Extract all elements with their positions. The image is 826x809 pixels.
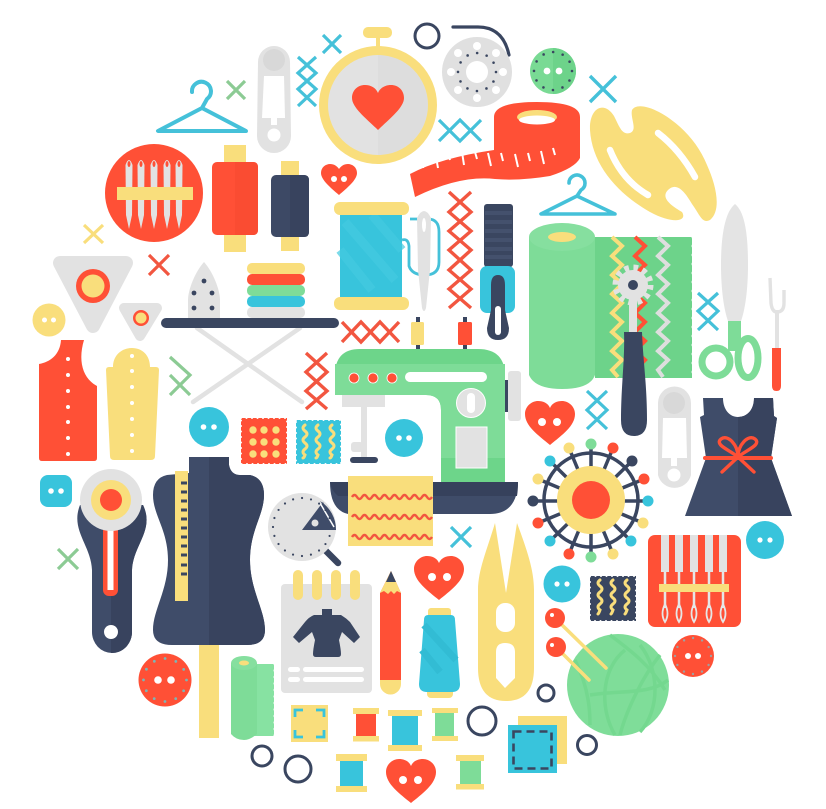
icon: scissors bbox=[702, 204, 758, 378]
icon: cyan stitch horizontal bbox=[439, 120, 481, 141]
icon: cross marks left bbox=[84, 225, 169, 275]
icon: yellow button bbox=[32, 304, 66, 336]
icon: cyan cross center bbox=[451, 527, 471, 547]
icon: bottom green spool bbox=[456, 755, 484, 790]
icon: needles on red circle bbox=[105, 144, 203, 242]
icon: yellow sleeve pattern bbox=[106, 348, 159, 460]
icon: heart button small bbox=[321, 164, 357, 195]
icon: blue thread spool bbox=[334, 202, 409, 310]
icon: safety pin top bbox=[257, 46, 291, 153]
icon: safety pin right bbox=[658, 387, 691, 488]
icon: ring 2 bbox=[538, 685, 554, 701]
icon: hanger right bbox=[541, 175, 615, 214]
icon: red button right bbox=[672, 635, 714, 677]
icon: cyan square button bbox=[40, 475, 72, 507]
icon: green stitch bbox=[170, 357, 190, 395]
icon: cyan stitch right bbox=[698, 293, 718, 330]
icon: ring 1 bbox=[468, 707, 496, 735]
icon: seam ripper bbox=[770, 278, 784, 391]
icon: bottom cyan spool bbox=[336, 754, 367, 792]
icon: red stitch column bbox=[449, 192, 471, 308]
icon: dress form mannequin bbox=[153, 457, 265, 738]
icon: bottom heart button bbox=[386, 759, 436, 803]
icon: green button top bbox=[530, 48, 576, 94]
icon: small green spool bbox=[432, 708, 458, 741]
icon: fabric roll with ric-rac and tracing wheel bbox=[529, 223, 694, 436]
icon: ironing board bbox=[161, 318, 339, 402]
icon: pincushion bbox=[528, 438, 654, 562]
icon: small red spool bbox=[353, 708, 379, 742]
icon: navy spool bbox=[271, 161, 309, 251]
icon: navy swatch bbox=[590, 576, 636, 621]
icon: spools above sewing machine bbox=[411, 317, 472, 349]
icon: cyan stitch column bbox=[298, 57, 316, 106]
icon: thread cone bbox=[419, 608, 460, 698]
icon: cyan stitch below roll bbox=[587, 391, 607, 429]
icon: needle pack bbox=[648, 535, 741, 627]
icon: tape measure bbox=[410, 102, 580, 197]
icon: layered swatches bbox=[508, 716, 567, 773]
icon: cyan button lower bbox=[544, 566, 580, 602]
icon: ring 4 bbox=[252, 746, 272, 766]
icon: red bodice pattern bbox=[39, 340, 97, 461]
icon: cyan cross top right bbox=[590, 76, 616, 102]
icon: bobbin disc bbox=[442, 27, 512, 107]
icon: zipper pull bbox=[480, 204, 515, 340]
icon: cross stitches top left bbox=[227, 35, 341, 99]
icon: thread snips bbox=[478, 523, 534, 701]
icon: heart button bbox=[525, 401, 575, 445]
icon: embroidery hoop with heart bbox=[319, 27, 437, 164]
icon: tailor chalk small bbox=[124, 308, 157, 336]
icon: stacked fabric bbox=[247, 263, 305, 318]
icon: cyan swatch bbox=[296, 420, 341, 464]
icon: ring 3 bbox=[578, 736, 596, 754]
icon: red swatch bbox=[241, 418, 287, 464]
icon: yellow swatch with cyan corners bbox=[291, 705, 328, 742]
icon: small green fabric roll bbox=[231, 656, 275, 740]
icon: red spool bbox=[212, 145, 258, 252]
icon: ring 5 bbox=[285, 756, 311, 782]
icon: sewing machine bbox=[330, 349, 521, 514]
icon: yarn ball with knitting needles bbox=[545, 608, 669, 736]
icon: rotary cutter bbox=[77, 469, 147, 653]
icon: cyan button middle bbox=[385, 419, 423, 457]
icon: cyan button right bbox=[746, 521, 784, 559]
icon: small cyan spool bbox=[388, 710, 422, 751]
icon: green cross left bbox=[58, 549, 78, 569]
icon: red heart button center bbox=[414, 556, 464, 600]
icon: hanger left bbox=[158, 82, 246, 131]
icon: navy dress with bow bbox=[685, 398, 792, 516]
icon: yellow fabric with stitching bbox=[348, 476, 433, 546]
icon: ring top bbox=[415, 24, 439, 48]
icon: cyan button left bbox=[189, 407, 229, 447]
icon: red button lower left bbox=[138, 654, 192, 706]
icon: tailor chalk large bbox=[60, 263, 126, 326]
icon: yellow thread winder bbox=[590, 106, 717, 221]
icon: stitch marker gauge bbox=[268, 493, 338, 563]
icon: needle with cyan thread bbox=[402, 211, 439, 311]
icon: pencil bbox=[380, 571, 401, 695]
icon: red stitch near machine bbox=[306, 353, 327, 409]
icon: notepad with jacket sketch bbox=[281, 570, 372, 693]
icon: iron bbox=[188, 262, 220, 318]
icon: red stitch horizontal bbox=[342, 322, 399, 342]
